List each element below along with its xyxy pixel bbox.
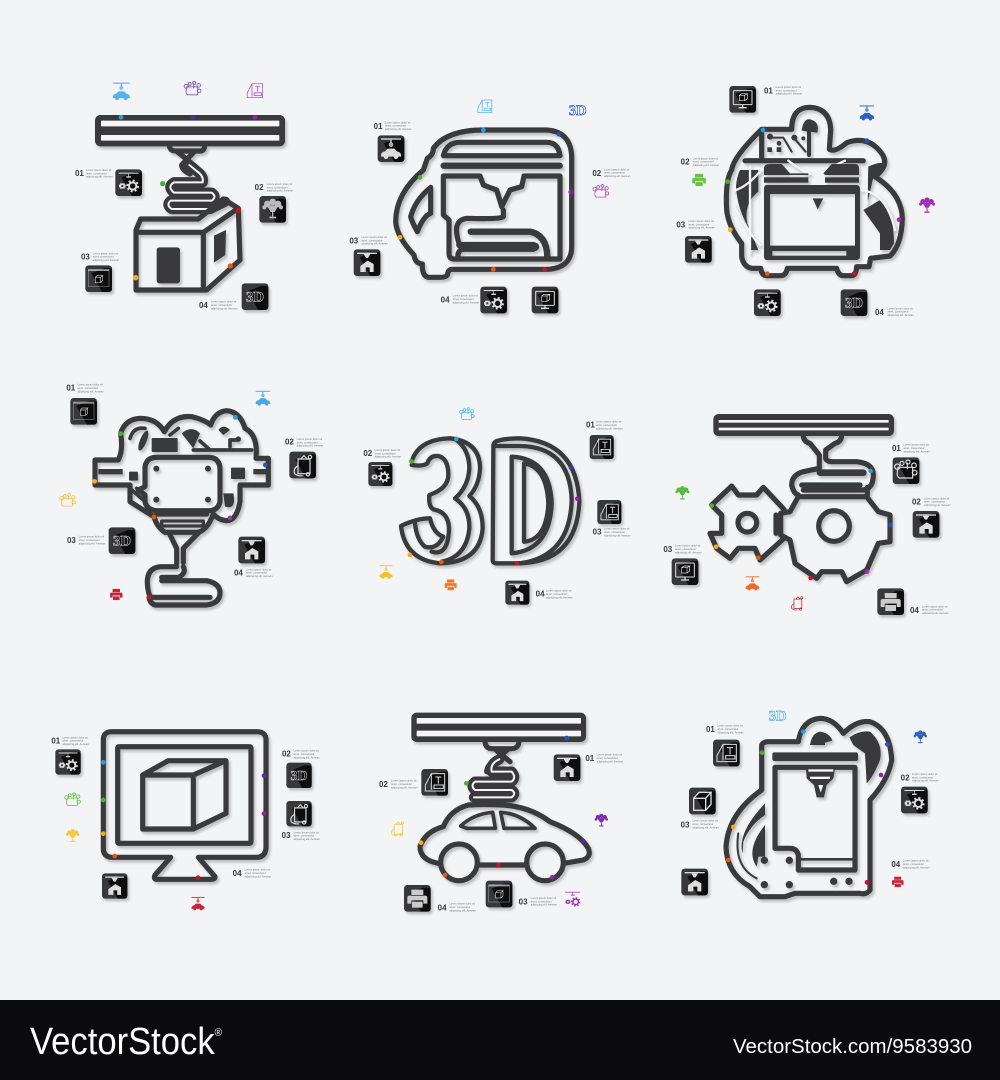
label 04: amet, consectetur	[887, 310, 909, 314]
footer band	[0, 1000, 1000, 1080]
label 02: adipiscing elit. Aenean	[293, 755, 320, 759]
label 02: Lorem ipsum dolor sit	[267, 183, 292, 186]
icon tile: press	[713, 740, 740, 766]
label 01: 01	[374, 122, 383, 131]
label 02: Lorem ipsum dolor sit	[293, 750, 319, 753]
icon: gears	[565, 892, 580, 906]
label 01: amet, consectetur	[717, 727, 739, 731]
label 02: 02	[379, 780, 388, 789]
label 01	[585, 753, 624, 763]
icon tile: 3D: 3D	[290, 769, 308, 784]
icon tile: gears	[480, 287, 507, 313]
label 04: Lorem ipsum dolor sit	[453, 295, 478, 298]
label 04: 04	[875, 308, 884, 317]
label 04: 04	[441, 295, 450, 304]
label 04: 04	[438, 903, 447, 912]
cube line art	[95, 115, 285, 290]
icon tile: gears	[115, 169, 142, 196]
icon tile: house	[681, 869, 708, 895]
label 02	[285, 437, 324, 448]
label 01: Lorem ipsum dolor sit	[597, 754, 622, 757]
label 01: 01	[51, 736, 61, 745]
label 03: adipiscing elit. Aenean	[361, 242, 388, 246]
label 01: adipiscing elit. Aenean	[596, 426, 623, 430]
icon tile: 3D	[286, 763, 312, 788]
icon tile: tree	[259, 196, 286, 223]
label 01: amet, consectetur	[86, 171, 107, 175]
label 03: 03	[593, 528, 602, 537]
label 01: 01	[66, 384, 76, 393]
label 02: amet, consectetur	[604, 171, 625, 175]
panel: desktop 3D printer	[676, 85, 935, 317]
colour node dots	[101, 760, 266, 880]
label 03: 03	[663, 545, 673, 554]
label 03: Lorem ipsum dolor sit	[93, 252, 118, 255]
icon: printer	[892, 877, 904, 887]
label 02: Lorem ipsum dolor sit	[693, 157, 718, 160]
label 03: Lorem ipsum dolor sit	[79, 536, 104, 539]
label 01: adipiscing elit. Aenean	[62, 742, 89, 746]
icon: printer	[445, 579, 457, 590]
label 03: 03	[519, 897, 528, 906]
label 02: 02	[282, 750, 291, 759]
colour node dots	[119, 115, 257, 280]
label 02	[363, 448, 402, 459]
label 04: Lorem ipsum dolor sit	[546, 590, 571, 593]
label 02: 02	[255, 183, 264, 192]
icon tile: 3D	[841, 289, 867, 316]
extruder line art	[95, 411, 268, 605]
label 01: Lorem ipsum dolor sit	[903, 444, 929, 447]
car line art	[411, 713, 589, 881]
label 03: amet, consectetur	[361, 238, 383, 242]
label 02: Lorem ipsum dolor sit	[297, 438, 322, 441]
label 01: adipiscing elit. Aenean	[597, 759, 624, 763]
panel: printer head over car	[379, 713, 624, 912]
label 03: amet, consectetur	[293, 834, 315, 838]
label 02: Lorem ipsum dolor sit	[912, 773, 937, 776]
label 01	[892, 443, 930, 453]
label 03: 03	[81, 252, 90, 261]
label 04: 04	[910, 606, 919, 615]
label 02: amet, consectetur	[391, 782, 412, 786]
label 02	[379, 779, 418, 789]
panel: monitor with cube	[51, 732, 320, 910]
label 01: adipiscing elit. Aenean	[77, 389, 104, 393]
label 03: Lorem ipsum dolor sit	[361, 236, 387, 239]
panel: printer side view	[349, 100, 631, 313]
label 04	[536, 589, 573, 599]
label 04: amet, consectetur	[449, 905, 471, 909]
label 03: adipiscing elit. Aenean	[531, 903, 558, 907]
icon tile: box	[486, 881, 512, 907]
label 02: amet, consectetur	[912, 775, 933, 779]
label 03: Lorem ipsum dolor sit	[604, 528, 629, 531]
label 04: 04	[199, 301, 208, 310]
icon: tree	[675, 486, 689, 500]
icon tile: house	[354, 249, 380, 276]
icon: tree	[914, 730, 927, 743]
icon: press	[478, 100, 492, 113]
label 02: adipiscing elit. Aenean	[297, 444, 324, 448]
label 01	[75, 168, 113, 179]
label 02: amet, consectetur	[924, 500, 945, 504]
panel: gears under printer head	[663, 414, 951, 615]
label 02: Lorem ipsum dolor sit	[375, 449, 400, 452]
icon: press	[247, 84, 263, 98]
label 03: Lorem ipsum dolor sit	[531, 897, 556, 900]
icon tile: gears	[55, 749, 81, 775]
label 04: adipiscing elit. Aenean	[246, 574, 273, 578]
icon: car	[113, 83, 130, 100]
label 01: 01	[764, 86, 773, 95]
label 03	[349, 235, 388, 246]
icon: pot	[65, 793, 80, 805]
label 02: adipiscing elit. Aenean	[924, 503, 951, 507]
label 01: amet, consectetur	[903, 446, 925, 450]
colour node dots	[419, 736, 586, 880]
label 02	[592, 167, 631, 178]
colour node dots	[725, 128, 901, 276]
colour node dots	[408, 437, 580, 566]
icon tile: house	[685, 236, 712, 263]
label 03	[81, 251, 120, 262]
label 03	[67, 535, 106, 545]
label 03: Lorem ipsum dolor sit	[688, 220, 714, 223]
label 01: 01	[75, 169, 84, 178]
label 04: amet, consectetur	[903, 862, 924, 866]
label 04: Lorem ipsum dolor sit	[246, 568, 271, 571]
label 03	[519, 896, 558, 907]
tablet line art	[726, 718, 892, 897]
icon tile: tablet	[286, 801, 312, 826]
label 02	[912, 496, 951, 507]
panel: 3D lettering	[363, 408, 631, 605]
label 04	[875, 306, 914, 317]
icon tile: printer	[877, 588, 904, 615]
3D line art	[401, 438, 579, 563]
label 04: amet, consectetur	[246, 571, 267, 575]
colour node dots	[92, 415, 268, 600]
label 02: 02	[912, 498, 921, 507]
icon: tree	[919, 197, 935, 213]
icon: car	[860, 105, 874, 120]
icon: car	[191, 897, 204, 910]
label 01: amet, consectetur	[62, 739, 84, 743]
label 01: Lorem ipsum dolor sit	[77, 384, 103, 387]
label 04	[441, 294, 480, 304]
label 03: adipiscing elit. Aenean	[604, 533, 631, 537]
label 03	[676, 219, 715, 230]
label 01: Lorem ipsum dolor sit	[62, 736, 88, 739]
label 04: 04	[536, 590, 545, 599]
icon tile: 3D: 3D	[113, 534, 131, 550]
icon: pot	[460, 408, 474, 419]
label 03: adipiscing elit. Aenean	[688, 226, 715, 230]
icon tile: house	[554, 754, 580, 781]
icon tile: monitor	[672, 558, 698, 585]
label 03: amet, consectetur	[604, 530, 625, 534]
label 03: adipiscing elit. Aenean	[79, 541, 106, 545]
label 04: Lorem ipsum dolor sit	[903, 860, 928, 863]
icon tile: house	[238, 537, 265, 563]
label 02: 02	[901, 773, 910, 782]
label 01: adipiscing elit. Aenean	[385, 127, 412, 131]
icon tile: 3D	[109, 527, 135, 554]
icon: pot	[593, 185, 609, 197]
label 01: amet, consectetur	[77, 386, 99, 390]
icon: printer	[110, 589, 122, 600]
colour node dots	[709, 469, 893, 580]
colour node dots	[398, 128, 573, 272]
icon tile: cube	[689, 788, 716, 814]
label 03: 03	[282, 831, 291, 840]
icon tile: house	[505, 581, 529, 605]
label 04: adipiscing elit. Aenean	[887, 313, 914, 317]
colour node dots	[726, 729, 890, 885]
label 03: amet, consectetur	[692, 822, 714, 826]
label 03: amet, consectetur	[675, 547, 696, 551]
label 03: 03	[349, 237, 359, 246]
label 04: adipiscing elit. Aenean	[922, 611, 949, 615]
label 04: 04	[891, 860, 901, 869]
label 03: adipiscing elit. Aenean	[93, 258, 120, 262]
label 04	[910, 604, 949, 615]
label 02: amet, consectetur	[293, 752, 315, 756]
label 04	[234, 567, 273, 578]
label 01: Lorem ipsum dolor sit	[717, 725, 743, 728]
label 01: Lorem ipsum dolor sit	[776, 86, 801, 89]
icon tile: 3D: 3D	[246, 290, 264, 306]
icon: pot	[60, 494, 75, 506]
label 03: Lorem ipsum dolor sit	[692, 820, 718, 823]
label 03	[663, 544, 702, 554]
printer line art	[396, 130, 572, 277]
icon: pot	[184, 81, 201, 95]
panel: tablet printer	[681, 709, 939, 897]
label 02	[681, 156, 720, 167]
label 01: 01	[706, 725, 715, 734]
desktop printer line art	[726, 107, 902, 276]
label 02: adipiscing elit. Aenean	[912, 779, 939, 783]
label 04: adipiscing elit. Aenean	[211, 306, 238, 310]
icon tile: house	[102, 873, 127, 899]
icon tile: tablet	[289, 452, 316, 478]
label 02: Lorem ipsum dolor sit	[604, 168, 629, 171]
icon tile: press	[597, 500, 621, 524]
monitor line art	[103, 732, 266, 879]
icon: car	[379, 565, 392, 579]
label 03: Lorem ipsum dolor sit	[675, 545, 700, 548]
label 03	[593, 527, 631, 537]
label 04: adipiscing elit. Aenean	[245, 874, 272, 878]
label 03: adipiscing elit. Aenean	[692, 825, 719, 829]
label 02: amet, consectetur	[375, 451, 396, 455]
label 01: amet, consectetur	[776, 88, 797, 92]
label 03: 03	[67, 536, 76, 545]
panel: extruder head	[60, 383, 324, 605]
icon tile: gears	[901, 787, 928, 813]
icon: tree	[595, 814, 608, 827]
label 04	[438, 902, 476, 912]
icon tile: monitor	[729, 86, 756, 113]
label 02: adipiscing elit. Aenean	[267, 189, 294, 193]
label 04: Lorem ipsum dolor sit	[922, 605, 947, 608]
label 04	[891, 859, 930, 869]
label 04: amet, consectetur	[922, 608, 943, 612]
label 02: adipiscing elit. Aenean	[375, 455, 402, 459]
icon tile: press	[421, 769, 448, 796]
label 01	[764, 85, 803, 96]
label 02	[901, 772, 939, 783]
label 04: adipiscing elit. Aenean	[453, 300, 480, 304]
label 04	[199, 300, 238, 310]
label 01: amet, consectetur	[597, 756, 618, 760]
footer image id: VectorStock.com/9583930	[733, 1036, 972, 1058]
icon: 3D: 3D	[769, 709, 787, 725]
label 01	[586, 420, 623, 430]
icon: tablet	[392, 822, 404, 836]
label 01: 01	[586, 420, 595, 429]
panel: printer head over cube	[75, 81, 294, 310]
label 03: Lorem ipsum dolor sit	[293, 831, 319, 834]
label 01: 01	[892, 444, 901, 453]
label 03: amet, consectetur	[93, 255, 114, 259]
label 02: amet, consectetur	[267, 185, 288, 189]
label 02: 02	[363, 449, 373, 458]
icon tile: house	[913, 511, 939, 538]
label 03: amet, consectetur	[531, 899, 552, 903]
label 02	[255, 182, 294, 193]
label 03	[282, 830, 320, 841]
label 02: amet, consectetur	[297, 440, 318, 444]
label 01	[706, 724, 744, 734]
label 02: adipiscing elit. Aenean	[693, 163, 720, 167]
label 03: 03	[681, 820, 690, 829]
label 01: adipiscing elit. Aenean	[717, 730, 744, 734]
label 01: 01	[585, 754, 595, 763]
icon tile: box	[70, 398, 97, 425]
icon: car	[256, 391, 270, 406]
label 02: 02	[681, 158, 690, 167]
label 01: Lorem ipsum dolor sit	[596, 421, 621, 424]
label 04: amet, consectetur	[546, 592, 567, 596]
icon: tree	[66, 829, 79, 842]
icon tile: monitor	[532, 287, 558, 313]
label 04: amet, consectetur	[211, 303, 232, 307]
label 04: amet, consectetur	[453, 297, 474, 301]
icon tile: press	[590, 435, 614, 459]
label 01: amet, consectetur	[596, 423, 617, 427]
label 01: adipiscing elit. Aenean	[776, 92, 803, 96]
label 01	[374, 120, 412, 131]
icon tile: box	[85, 265, 112, 292]
label 04	[233, 868, 272, 878]
label 01: Lorem ipsum dolor sit	[86, 169, 111, 172]
icon: car	[746, 576, 759, 590]
icon tile: pot	[893, 457, 919, 484]
icon tile: car	[378, 135, 404, 162]
footer logo text: ®	[215, 1027, 222, 1039]
label 01	[66, 383, 104, 393]
label 01: adipiscing elit. Aenean	[86, 175, 113, 179]
icon: 3D: 3D	[569, 103, 587, 119]
label 02: Lorem ipsum dolor sit	[391, 780, 416, 783]
icon tile: gears	[754, 289, 781, 316]
label 04: adipiscing elit. Aenean	[903, 865, 930, 869]
label 04: 04	[233, 869, 242, 878]
label 03: 03	[676, 221, 686, 230]
icon tile: printer	[404, 885, 431, 912]
icon tile: 3D: 3D	[845, 296, 863, 312]
label 02: adipiscing elit. Aenean	[391, 785, 418, 789]
label 02: adipiscing elit. Aenean	[604, 174, 631, 178]
label 04: adipiscing elit. Aenean	[449, 908, 476, 912]
label 01: Lorem ipsum dolor sit	[385, 121, 410, 124]
icon tile: 3D	[242, 283, 268, 310]
label 03: adipiscing elit. Aenean	[293, 837, 320, 841]
label 03: adipiscing elit. Aenean	[675, 550, 702, 554]
icon: tablet	[791, 597, 803, 610]
label 03: amet, consectetur	[79, 538, 100, 542]
label 02: amet, consectetur	[693, 160, 714, 164]
label 04: amet, consectetur	[245, 871, 266, 875]
icon: printer	[692, 174, 706, 186]
label 04: Lorem ipsum dolor sit	[887, 307, 913, 310]
label 02: 02	[285, 438, 294, 447]
label 01	[51, 735, 89, 746]
label 02: Lorem ipsum dolor sit	[924, 497, 949, 500]
label 01: amet, consectetur	[385, 124, 406, 128]
label 04: Lorem ipsum dolor sit	[449, 903, 475, 906]
label 04: Lorem ipsum dolor sit	[245, 869, 270, 872]
label 04: 04	[234, 569, 243, 578]
label 01: adipiscing elit. Aenean	[903, 449, 930, 453]
icon tile: gears	[368, 462, 392, 486]
label 03	[681, 819, 719, 829]
label 02: 02	[592, 169, 602, 178]
gears line art	[710, 414, 894, 582]
label 02	[282, 749, 320, 759]
label 04: adipiscing elit. Aenean	[546, 595, 573, 599]
label 04: Lorem ipsum dolor sit	[211, 301, 236, 304]
label 03: amet, consectetur	[688, 222, 710, 226]
footer logo text: VectorStock	[30, 1021, 233, 1063]
